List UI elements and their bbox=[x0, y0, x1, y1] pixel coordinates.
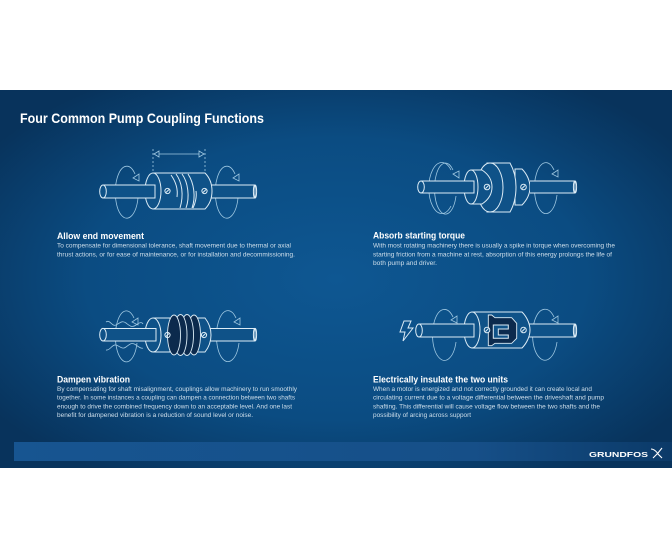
text: electrically insulate bbox=[373, 386, 605, 419]
right shaft bbox=[525, 324, 575, 337]
icon: left rotation arrow bbox=[115, 166, 139, 218]
text: absorb starting torque: both pump and driver. bbox=[373, 260, 437, 267]
diagram: allow end movement coupling bbox=[100, 149, 257, 218]
icon: right rotation arrow bbox=[533, 309, 558, 360]
icon: right rotation arrow bbox=[216, 311, 240, 362]
right hub bbox=[195, 318, 211, 352]
diagram: absorb starting torque coupling bbox=[418, 163, 577, 214]
heading: electrically insulate: Electrically insulate the two units bbox=[373, 375, 508, 385]
icon: left double rotation arrow bbox=[429, 163, 459, 214]
diagram: electrically insulate coupling bbox=[400, 309, 577, 360]
icon: left rotation arrow bbox=[115, 311, 138, 362]
left shaft bbox=[103, 328, 156, 341]
footer bar bbox=[14, 442, 672, 461]
coupling body bbox=[487, 163, 516, 212]
heading: dampen vibration: Dampen vibration bbox=[57, 375, 130, 385]
icon: lightning bolt bbox=[400, 321, 413, 341]
text: dampen vibration: enough to drive the combined frequency down to an acceptable level. And one last bbox=[57, 403, 292, 410]
icon: left rotation arrow bbox=[432, 309, 457, 360]
text: allow end movement: To compensate for dimensional tolerance, shaft movement due to thermal or axial bbox=[57, 242, 291, 250]
icon: Grundfos X mark bbox=[651, 448, 662, 458]
coupling body bbox=[153, 173, 212, 209]
dark elastomer rings bbox=[168, 314, 200, 356]
slotted grooves bbox=[171, 174, 196, 208]
left shaft bbox=[419, 324, 474, 337]
text: allow end movement bbox=[57, 242, 295, 258]
right shaft bbox=[530, 181, 575, 193]
left hub bbox=[153, 318, 170, 352]
text: allow end movement: thrust actions, or for ease of maintenance, or for installation and decommissioning. bbox=[57, 252, 295, 258]
text: absorb starting torque bbox=[373, 242, 615, 267]
right hub bbox=[515, 169, 530, 205]
interlocking jaw insert bbox=[488, 315, 517, 346]
icon: right rotation arrow bbox=[534, 163, 558, 214]
text: electrically insulate: shafting. This differential will cause voltage flow between the two shafts and the bbox=[373, 403, 600, 410]
text: electrically insulate: When a motor is energized and not correctly grounded it can create local and bbox=[373, 386, 593, 393]
text: absorb starting torque: starting friction from a machine at rest, absorption of this energy prolongs the life of bbox=[373, 252, 612, 258]
panel: blueprint background bbox=[0, 90, 672, 468]
left shaft bbox=[103, 185, 155, 198]
left shaft bbox=[421, 181, 474, 193]
heading: absorb starting torque: Absorb starting torque bbox=[373, 230, 465, 240]
text: dampen vibration: By compensating for shaft misalignment, couplings allow machinery to run smoothly bbox=[57, 386, 298, 393]
text: dampen vibration: together. In some instances a coupling can dampen a connection between two shafts bbox=[57, 395, 295, 402]
icon: vibration waves bbox=[106, 321, 143, 350]
text: electrically insulate: circulating current due to a voltage differential between the driveshaft and pump bbox=[373, 395, 605, 402]
logo: Grundfos: GRUNDFOS bbox=[589, 450, 648, 459]
icon: right rotation arrow bbox=[215, 166, 239, 218]
diagram: dampen vibration coupling bbox=[100, 311, 257, 362]
text: dampen vibration bbox=[57, 386, 298, 419]
right shaft bbox=[205, 185, 255, 198]
text: absorb starting torque: With most rotating machinery there is usually a spike in torque when overcoming the bbox=[373, 242, 615, 250]
right shaft bbox=[205, 328, 255, 341]
icon: movement arrow with dashed limits bbox=[153, 149, 205, 174]
coupling body bbox=[472, 312, 530, 348]
heading: allow end movement: Allow end movement bbox=[57, 231, 144, 241]
title: Four Common Pump Coupling Functions bbox=[20, 110, 264, 126]
left hub bbox=[471, 170, 492, 204]
text: electrically insulate: possibility of arcing across support bbox=[373, 412, 471, 419]
text: dampen vibration: benefit for dampened vibration is a reduction of sound level or noise. bbox=[57, 412, 253, 419]
logo: Grundfos bbox=[589, 448, 662, 459]
